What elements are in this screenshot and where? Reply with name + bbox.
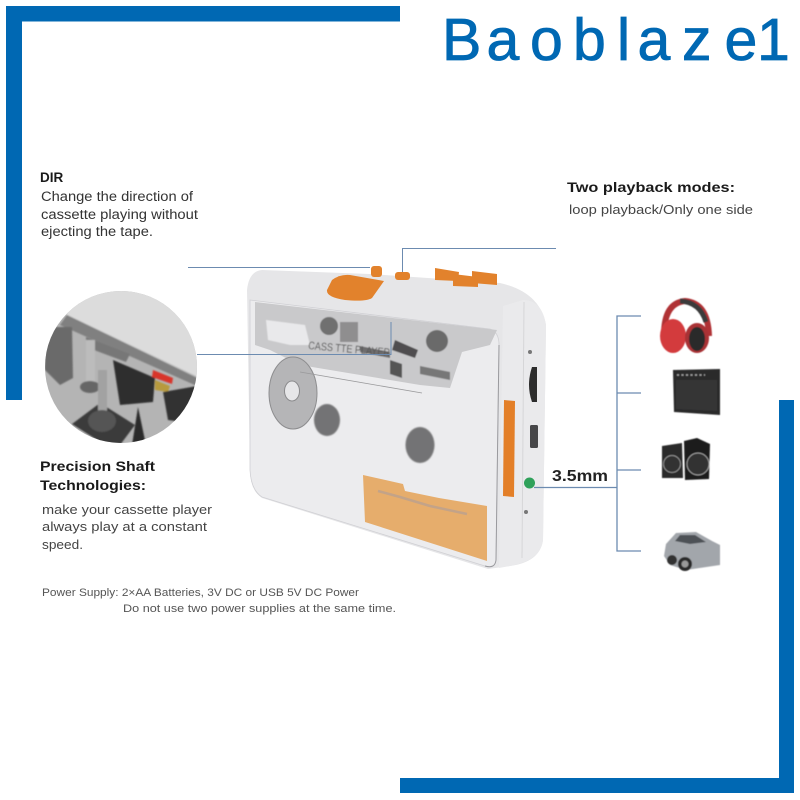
connector bracket (534, 316, 641, 551)
text block: DIR: DIR (40, 170, 64, 185)
orange label (363, 475, 487, 561)
device buttons (371, 266, 497, 287)
label: 3.5mm: 3.5mm (552, 468, 608, 485)
text block: two playback modes (567, 179, 753, 217)
frame: top-left blue corner (6, 6, 400, 400)
device side panel (499, 300, 546, 568)
cassette mechanism window: CASS TTE PLAYER (308, 340, 391, 359)
callout lines to device (188, 248, 556, 354)
icon: guitar amplifier (673, 369, 720, 415)
detail lens: precision shaft (40, 285, 200, 445)
text block: two playback modes: Two playback modes: (567, 179, 735, 195)
text block: precision shaft technologies: Technologies: (40, 477, 146, 493)
text block: power supply note: Power Supply: 2×AA Batteries, 3V DC or USB 5V DC Power (42, 587, 359, 599)
cassette reel disc (269, 357, 317, 429)
text block: precision shaft technologies: make your cassette player (42, 502, 213, 517)
text block: power supply note: Do not use two power supplies at the same time. (123, 603, 396, 615)
brand logo: Baoblaze1 (442, 7, 790, 73)
text block: precision shaft technologies (40, 458, 213, 552)
transparent front cover (250, 300, 499, 567)
tape slot line (300, 372, 422, 393)
text block: precision shaft technologies: speed. (42, 537, 83, 552)
icon: headphones (660, 301, 709, 353)
device body (247, 270, 546, 569)
frame: bottom-right blue corner (400, 400, 794, 793)
illustration: cassette player (247, 266, 546, 569)
text block: precision shaft technologies: Precision Shaft (40, 458, 155, 474)
text block: DIR: cassette playing without (41, 207, 198, 222)
spindle knobs (314, 404, 434, 463)
text block: precision shaft technologies: always play at a constant (42, 519, 207, 534)
orange slider switch (327, 275, 384, 301)
text block: two playback modes: loop playback/Only one side (569, 202, 753, 217)
cassette mechanism window (255, 302, 497, 388)
text block: power supply note (42, 587, 396, 615)
text block: DIR: Change the direction of (41, 189, 193, 204)
icon: car (664, 532, 720, 571)
icon: speakers (662, 438, 710, 480)
orange volume wheel (503, 400, 515, 497)
side ports (524, 350, 538, 514)
text block: DIR: ejecting the tape. (41, 224, 153, 239)
text block: DIR (40, 170, 198, 239)
